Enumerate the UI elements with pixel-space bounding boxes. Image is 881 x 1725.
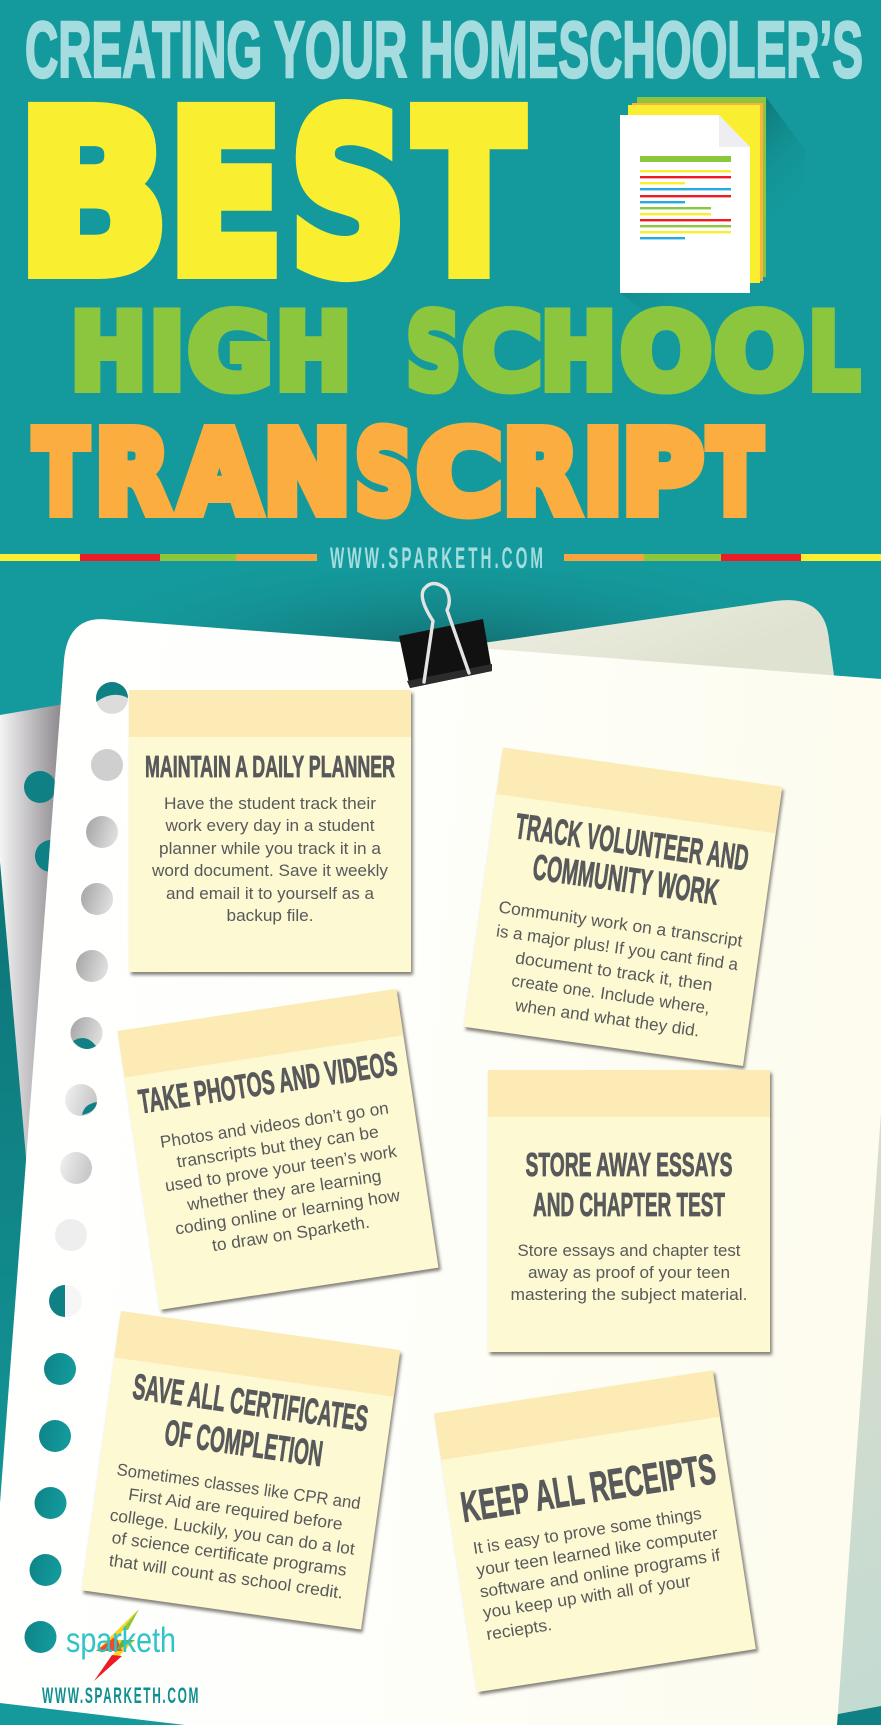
title: best: B — [17, 67, 169, 324]
sticky note: save all certificates of completion: that will count as school credit. — [108, 1551, 344, 1603]
sticky note: keep all receipts — [434, 1370, 758, 1695]
sticky note: save all certificates of completion: of science certificate programs — [111, 1528, 348, 1580]
title: transcript: N — [264, 409, 350, 539]
sticky note: save all certificates of completion: First Aid are required before — [127, 1485, 344, 1534]
sticky note: track volunteer and community work: COMMUNITY WORK — [530, 846, 721, 913]
sticky note: track volunteer and community work — [463, 748, 784, 1069]
title: transcript: T — [708, 409, 762, 539]
sticky note: track volunteer and community work: Community work on a transcript — [497, 898, 744, 951]
sticky note: maintain a daily planner: backup file. — [226, 906, 314, 925]
sticky note: take photos and videos: whether they are learning — [185, 1166, 383, 1215]
title: best — [17, 67, 523, 324]
sticky note: track volunteer and community work: when and what they did. — [513, 996, 701, 1041]
sticky note: keep all receipts: your teen learned like computer — [475, 1524, 719, 1580]
title: high school: H — [541, 293, 616, 413]
sticky note: take photos and videos: to draw on Sparketh. — [211, 1213, 371, 1255]
binder holes — [24, 682, 128, 1653]
sticky note: track volunteer and community work: is a major plus! If you cant find a — [495, 921, 740, 974]
title: high school: H — [71, 293, 146, 413]
sticky note: maintain a daily planner: word document. Save it weekly — [151, 861, 388, 880]
title: high school: O — [715, 293, 804, 413]
title: transcript: I — [583, 409, 623, 539]
sticky note: save all certificates of completion: OF COMPLETION — [162, 1412, 325, 1474]
sparketh logo — [66, 1609, 176, 1681]
sticky note: store away essays and chapter test — [488, 1070, 772, 1355]
sticky note: take photos and videos — [118, 989, 441, 1313]
bottom right teal corner — [820, 1700, 881, 1725]
sticky note: track volunteer and community work: create one. Include where, — [510, 971, 711, 1018]
sticky note: store away essays and chapter test: STORE AWAY ESSAYS — [526, 1146, 732, 1183]
sticky note: store away essays and chapter test: away as proof of your teen — [528, 1263, 730, 1282]
title: high school: O — [621, 293, 712, 413]
back page left — [0, 703, 70, 1180]
sticky note: take photos and videos: coding online or learning how — [174, 1186, 402, 1238]
title: transcript — [34, 409, 762, 539]
title: high school: H — [276, 293, 351, 413]
sticky note: save all certificates of completion: Sometimes classes like CPR and — [116, 1460, 362, 1513]
left teal strip shading — [0, 850, 60, 1610]
sticky note: keep all receipts: reciepts. — [485, 1615, 553, 1644]
binder clip — [399, 584, 492, 688]
sticky note: store away essays and chapter test: mastering the subject material. — [510, 1285, 748, 1304]
title: high school: I — [149, 293, 185, 413]
sticky note: take photos and videos: Photos and videos don’t go on — [159, 1098, 390, 1152]
sticky note: store away essays and chapter test: AND CHAPTER TEST — [533, 1186, 725, 1223]
sticky note: save all certificates of completion: SAVE ALL CERTIFICATES — [130, 1366, 371, 1439]
title: transcript: T — [34, 409, 88, 539]
sticky note: take photos and videos: TAKE PHOTOS AND VIDEOS — [136, 1045, 400, 1121]
website url: WWW.SPARKETH.COM — [330, 542, 546, 575]
sticky note: maintain a daily planner: planner while you track it in a — [159, 839, 382, 858]
main notebook page — [0, 619, 881, 1725]
sticky note: keep all receipts: software and online programs if — [478, 1545, 722, 1601]
sticky note: maintain a daily planner — [129, 690, 413, 975]
sticky note: store away essays and chapter test: Store essays and chapter test — [518, 1241, 741, 1260]
title: high school — [71, 293, 859, 413]
title: transcript: R — [503, 409, 579, 539]
sparketh logo: sparketh — [66, 1621, 176, 1660]
back page right — [400, 600, 881, 1725]
title: best: E — [168, 67, 283, 324]
sticky note: keep all receipts: It is easy to prove some things — [472, 1504, 703, 1558]
title: transcript: P — [622, 409, 703, 539]
title: transcript: R — [95, 409, 170, 539]
document stack icon — [620, 97, 805, 345]
footer website url: WWW.SPARKETH.COM — [42, 1683, 200, 1708]
title: best: S — [290, 67, 406, 324]
sticky note: maintain a daily planner: MAINTAIN A DAILY PLANNER — [145, 749, 395, 784]
title: high school: G — [188, 293, 273, 413]
shadow behind pages — [0, 570, 881, 750]
title: high school: S — [406, 293, 460, 413]
divider right stripes — [564, 554, 881, 561]
sticky note: track volunteer and community work: document to track it, then — [514, 948, 714, 995]
divider left stripes — [0, 554, 317, 561]
title: transcript: C — [417, 409, 502, 539]
sticky note: maintain a daily planner: work every day in a student — [164, 816, 375, 835]
sticky note: maintain a daily planner: Have the student track their — [164, 794, 376, 813]
title: high school: C — [463, 293, 542, 413]
sticky note: keep all receipts: you keep up with all of your — [482, 1571, 692, 1622]
sticky note: save all certificates of completion — [81, 1311, 402, 1633]
title: transcript: S — [355, 409, 413, 539]
title: best: T — [415, 67, 523, 324]
sticky note: take photos and videos: transcripts but they can be — [175, 1122, 380, 1172]
sticky note: take photos and videos: used to prove your teen’s work — [164, 1142, 399, 1195]
title: high school: L — [809, 293, 859, 413]
sticky note: maintain a daily planner: and email it to yourself as a — [166, 884, 375, 903]
title: transcript: A — [180, 409, 260, 539]
sticky note: save all certificates of completion: college. Luckily, you can do a lot — [109, 1506, 356, 1559]
